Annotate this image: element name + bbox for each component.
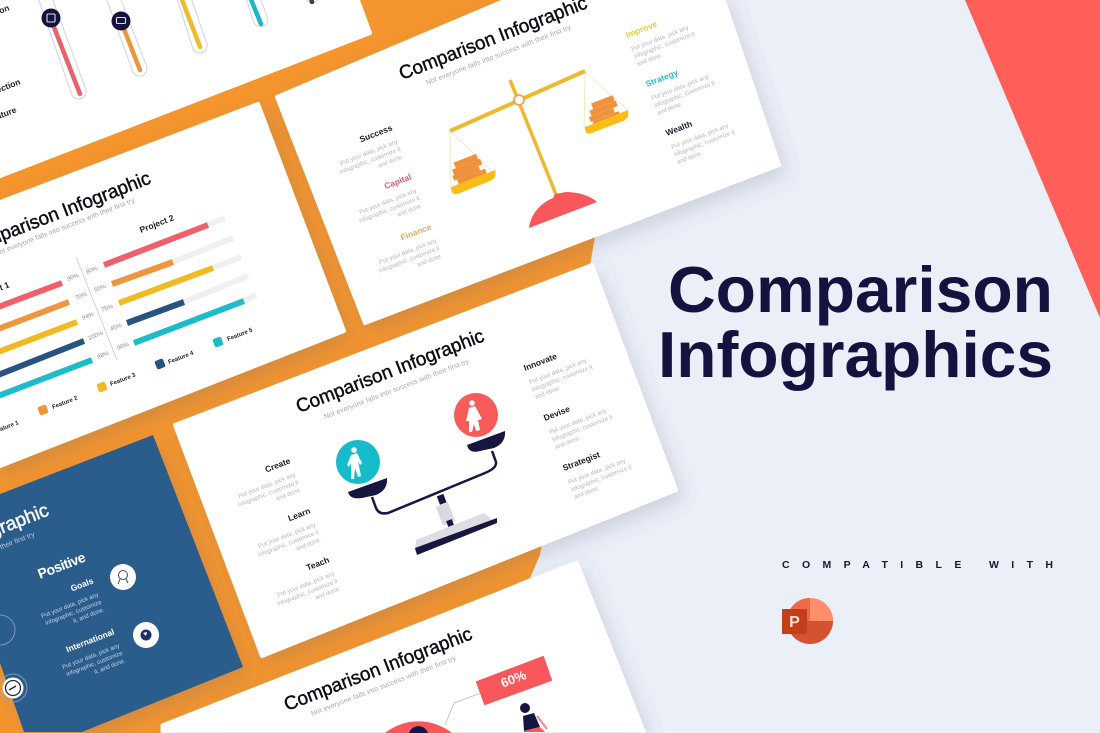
- left column: Create: infographic, customize it: [237, 480, 300, 509]
- left column: Create: [228, 455, 303, 516]
- right column: Wealth: Put your data, pick any: [671, 123, 730, 151]
- project 2 heading: Project 2: [138, 212, 175, 235]
- left column: Learn: Learn: [287, 506, 312, 523]
- thermometer 5: [305, 0, 319, 3]
- thermometer 4: [245, 0, 268, 27]
- slide subtitle: Not everyone falls into success with their first try: [310, 655, 458, 718]
- base: [529, 192, 597, 228]
- project 2 percentages: 45%: [110, 323, 124, 333]
- red dial: [385, 721, 452, 733]
- left column: Capital: Put your data, pick any: [359, 188, 418, 216]
- goals text: Put your data, pick any: [41, 592, 100, 620]
- left column: Teach: Put your data, pick any: [277, 571, 336, 599]
- left column: Learn: and done.: [296, 537, 323, 552]
- goals text: it, and done.: [73, 607, 106, 625]
- right coins: [585, 95, 621, 127]
- left column: Teach: [267, 554, 342, 615]
- right column: Strategist: and done.: [573, 485, 601, 501]
- legend: Feature 5: [227, 327, 254, 343]
- beam: [450, 71, 585, 131]
- base: [415, 513, 495, 552]
- main heading: [658, 253, 1053, 391]
- legend: Feature 3: [110, 372, 137, 388]
- panel: thermometer slide: [0, 0, 370, 178]
- panel: blue positive slide: [0, 435, 243, 732]
- left column: Finance: Put your data, pick any: [379, 238, 438, 266]
- icon: award badge: [110, 564, 136, 590]
- project 1 percentages: 94%: [82, 312, 96, 322]
- international text: [55, 626, 127, 686]
- dial center: [409, 726, 428, 733]
- project 2 bars: [104, 225, 244, 343]
- left column: Finance: Finance: [399, 221, 433, 242]
- left column: Capital: and done.: [397, 203, 424, 218]
- left arm of beam: [372, 451, 496, 513]
- right column: Improve: infographic, customize it: [634, 31, 696, 60]
- right pan strings: [584, 72, 628, 130]
- right column: Strategy: Strategy: [644, 67, 680, 89]
- right column: Wealth: and done.: [676, 150, 704, 166]
- left column: Teach: Teach: [305, 555, 331, 573]
- project 2 percentages: 50%: [94, 284, 108, 294]
- right column: Strategist: [561, 440, 636, 501]
- post: [510, 80, 557, 197]
- callout: 60%: [477, 657, 551, 704]
- goals text: Goals: [69, 575, 95, 593]
- left column: Capital: [349, 171, 424, 232]
- international text: International: [65, 627, 116, 654]
- right column: Innovate: Innovate: [522, 351, 559, 373]
- left column: Success: Success: [358, 122, 394, 144]
- left column: Success: [330, 122, 405, 183]
- divider: [76, 257, 117, 360]
- right column: Innovate: and done.: [534, 385, 562, 401]
- thermometer 1: [37, 0, 86, 99]
- teal person circle: [336, 440, 380, 484]
- callout: 60%: 60%: [499, 667, 529, 691]
- right column: Innovate: infographic, customize it: [532, 364, 594, 393]
- column: [437, 494, 447, 505]
- left column: Teach: infographic, customize it: [276, 579, 339, 608]
- left column: Finance: [369, 221, 444, 282]
- thermometer 3: [176, 0, 207, 53]
- left column: Success: and done.: [378, 154, 405, 169]
- right column: Strategy: [644, 56, 719, 117]
- slide subtitle: Not everyone falls into success with their first try: [425, 24, 573, 87]
- balance scale illustration: [448, 71, 628, 228]
- scale illustration: [336, 393, 505, 555]
- leader line: [445, 693, 481, 725]
- right column: Devise: Devise: [542, 404, 572, 423]
- legend: Feature 4: [168, 350, 195, 366]
- left column: Capital: infographic, customize it: [358, 196, 421, 225]
- compatible with label: COMPATIBLE WITH: [782, 559, 1053, 571]
- icon: PowerPoint: P: [789, 614, 800, 631]
- project 2 percentages: 75%: [101, 304, 115, 314]
- right column: Improve: [624, 7, 699, 68]
- left column: Learn: Put your data, pick any: [258, 522, 317, 550]
- left coins: [448, 153, 487, 185]
- right pan: [585, 110, 628, 134]
- left column: Success: Put your data, pick any: [340, 139, 399, 167]
- goals text: [34, 575, 106, 635]
- right column: Improve: Improve: [624, 18, 659, 40]
- red corner accent: [965, 0, 1100, 318]
- project 2 percentages: 90%: [117, 342, 131, 352]
- main heading: Comparison: [668, 253, 1053, 326]
- right column: Innovate: [522, 340, 597, 401]
- right column: Wealth: infographic, customize it: [674, 129, 736, 158]
- international text: Put your data, pick any: [62, 643, 121, 671]
- left column: Create: and done.: [276, 487, 303, 502]
- thermometer 2: [105, 0, 147, 76]
- left column: Finance: and done.: [417, 253, 444, 268]
- project 1 percentages: [67, 273, 111, 361]
- left pan strings: [450, 131, 493, 188]
- left column: Success: infographic, customize it: [339, 147, 402, 176]
- international text: it, and done.: [94, 658, 127, 676]
- person figure: [520, 703, 547, 732]
- right bowl: [467, 431, 505, 452]
- icon: arrow badge: [0, 674, 27, 702]
- right column: Innovate: Put your data, pick any: [529, 358, 588, 386]
- panel: gold balance slide: [277, 0, 779, 323]
- icon: PowerPoint: [782, 598, 833, 644]
- right column: Improve: and done.: [636, 52, 664, 68]
- left bowl: [348, 478, 387, 498]
- project 1 percentages: 100%: [88, 330, 105, 342]
- right column: Strategist: infographic, customize it: [571, 464, 633, 493]
- right column: Improve: Put your data, pick any: [631, 25, 690, 53]
- right column: Devise: and done.: [554, 435, 582, 451]
- right column: Devise: infographic, customize it: [552, 414, 614, 443]
- legend: Feature 2: [52, 395, 79, 411]
- left column: Finance: infographic, customize it: [378, 246, 441, 275]
- project 1 percentages: 98%: [97, 351, 111, 361]
- right column: Wealth: Wealth: [664, 119, 694, 138]
- positive heading: Positive: [35, 549, 88, 582]
- international text: infographic, customize: [66, 651, 124, 678]
- left column: Learn: infographic, customize it: [257, 530, 320, 559]
- slide title: Comparison Infographic: [293, 326, 487, 418]
- right column: Strategy: and done.: [656, 101, 684, 117]
- icon: outer ring: [0, 615, 15, 645]
- left column: Create: Put your data, pick any: [238, 472, 297, 500]
- icon: globe: [133, 622, 159, 648]
- right column: Devise: Put your data, pick any: [549, 408, 608, 436]
- slide subtitle: Not everyone falls into success with their first try: [323, 358, 471, 421]
- right column: Strategy: infographic, customize it: [654, 80, 716, 109]
- project 1 percentages: 90%: [67, 273, 81, 283]
- panel: people balance slide: [175, 265, 676, 656]
- orange backdrop: [0, 0, 600, 733]
- left column: Create: Create: [263, 455, 292, 474]
- legend: [0, 327, 254, 436]
- panel: pie chart slide: [162, 562, 644, 733]
- left column: Teach: and done.: [315, 586, 342, 601]
- project 1 bars: [0, 283, 92, 396]
- red person circle: [454, 393, 498, 437]
- project 2 percentages: [86, 266, 131, 352]
- right column: Devise: [542, 390, 617, 451]
- project 1 percentages: 70%: [75, 292, 89, 302]
- project 2 tracks: [173, 218, 256, 302]
- panel: bar chart slide: [0, 104, 344, 468]
- left pan: [451, 170, 495, 194]
- left column: Learn: [248, 505, 323, 566]
- goals text: infographic, customize: [45, 600, 103, 627]
- right column: Wealth: [664, 105, 739, 166]
- main heading: Infographics: [658, 318, 1053, 391]
- right column: Strategist: Strategist: [561, 449, 601, 473]
- right column: Strategy: Put your data, pick any: [651, 74, 710, 102]
- feature labels: [0, 3, 22, 125]
- project 2 percentages: 80%: [86, 266, 100, 276]
- pivot ring: [514, 95, 524, 105]
- left column: Capital: Capital: [383, 172, 413, 191]
- slide title: Comparison Infographic: [281, 624, 475, 716]
- right column: Strategist: Put your data, pick any: [568, 458, 627, 486]
